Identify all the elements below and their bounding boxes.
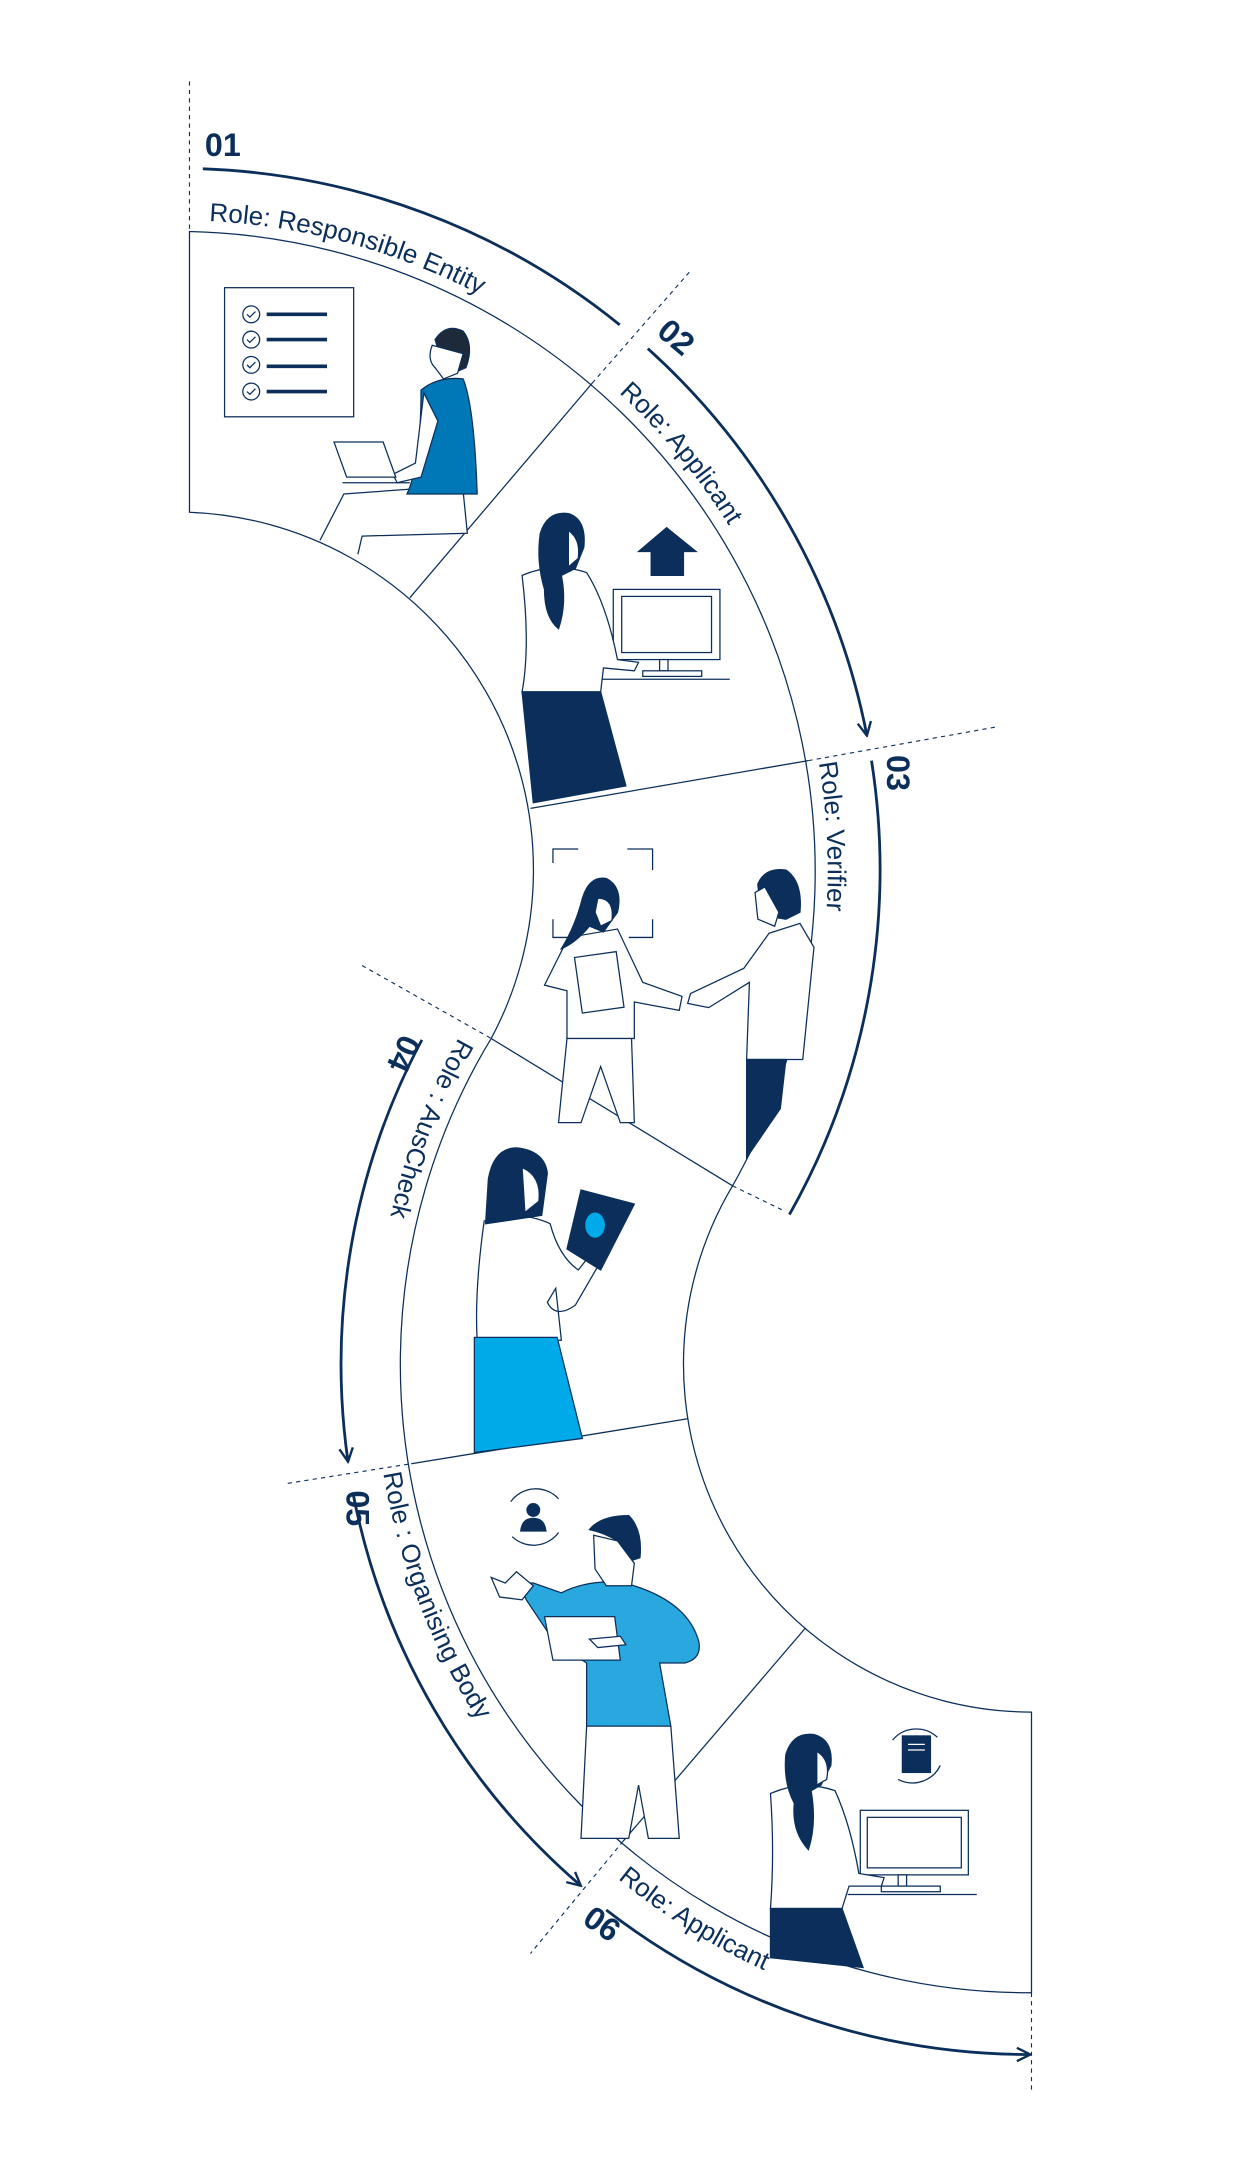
arrow 02 xyxy=(648,349,867,734)
face scan frame xyxy=(553,849,653,937)
man with tablet xyxy=(491,1516,699,1838)
arrow 04 xyxy=(341,1040,422,1460)
woman at computer xyxy=(770,1734,884,1967)
step number 06: 06 xyxy=(577,1899,627,1949)
icon: person with refresh arrows xyxy=(511,1489,559,1545)
label: AusCheck: Role : AusCheck xyxy=(390,1039,474,1219)
seated man with laptop xyxy=(320,328,477,554)
computer monitor xyxy=(601,589,730,679)
band arc 01 xyxy=(203,169,620,325)
label: Organising Body: Role : Organising Body xyxy=(384,1472,490,1717)
label: Applicant 06: Role: Applicant xyxy=(620,1866,770,1970)
S-shaped panel outline xyxy=(189,232,1031,1993)
checklist board xyxy=(225,288,354,417)
label: Verifier: Role: Verifier xyxy=(819,762,847,912)
arrow 06 xyxy=(606,1910,1029,2055)
step number 02: 02 xyxy=(651,312,702,362)
arrow 05 xyxy=(354,1496,580,1885)
icon: document with refresh arrows xyxy=(893,1729,940,1783)
label: Applicant 02: Role: Applicant xyxy=(620,381,742,526)
panel 03 illustration xyxy=(545,849,814,1158)
upload arrow icon xyxy=(639,528,696,575)
label: Responsible Entity: Role: Responsible Entity xyxy=(211,203,486,296)
woman holding document xyxy=(545,878,682,1123)
panel 05 illustration xyxy=(491,1489,699,1838)
woman with fingerprint tablet xyxy=(474,1148,634,1452)
computer monitor xyxy=(848,1810,977,1895)
step number 03: 03 xyxy=(880,755,916,791)
man shaking hands xyxy=(688,870,814,1158)
panel 01 illustration xyxy=(225,288,477,554)
woman at computer xyxy=(522,513,639,803)
panel 02 illustration xyxy=(522,513,730,803)
step number 01: 01 xyxy=(205,127,241,163)
step number 04: 04 xyxy=(380,1030,428,1078)
step number 05: 05 xyxy=(340,1490,376,1526)
panel 04 illustration xyxy=(474,1148,634,1452)
panel 06 illustration xyxy=(770,1729,977,1967)
band arc 03 xyxy=(789,761,880,1215)
